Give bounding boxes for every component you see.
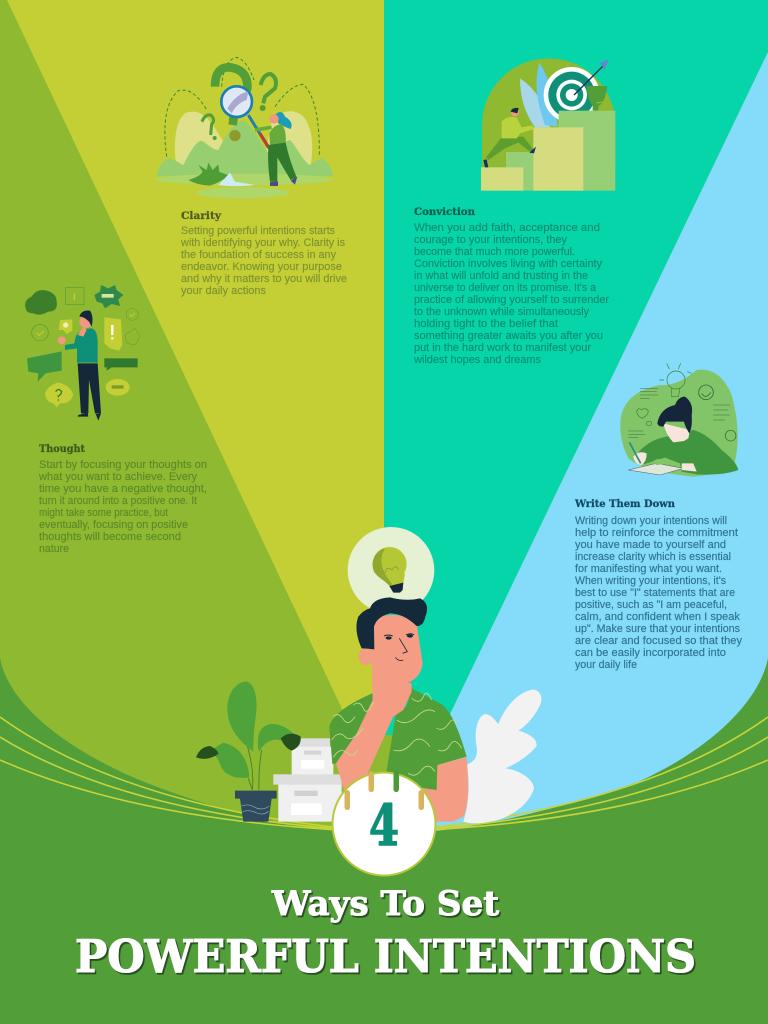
text block: thought [38,443,207,555]
text block: conviction: in what will unfold and trusting in the [414,270,588,282]
illustration: write them down [620,363,738,477]
text block: write them down: your daily life [575,659,637,671]
text block: clarity: Setting powerful intentions starts [181,225,336,237]
text block: write them down: you have made to yourself and [575,539,726,551]
text block: conviction: practice of allowing yourself to surrender [414,294,609,306]
text block: conviction: wildest hopes and dreams [413,354,542,366]
text block: conviction: Conviction involves living with certainty [414,258,603,270]
text block: conviction: put in the hard work to manifest your [414,342,591,354]
text block: thought: what you want to achieve. Every [38,471,198,483]
text block: clarity: the foundation of success in any [181,249,337,261]
text block: clarity: your daily actions [181,285,267,297]
text block: thought: time you have a negative thought, [39,483,207,495]
text block: conviction: holding tight to the belief that [414,318,558,330]
text block: write them down: for manifesting what you want. [575,563,722,575]
text block: write them down: can be easily incorporated into [575,647,726,659]
text block: thought: thoughts will become second [39,531,181,543]
number badge: 4 [369,793,399,859]
title: Ways To Set [271,884,499,924]
text block: conviction: courage to your intentions, they [414,234,568,246]
text block: write them down: Write Them Down [574,498,675,510]
illustration: light bulb [348,527,434,614]
text block: conviction: something greater awaits you after you [414,330,603,342]
number badge [332,771,436,876]
text block: write them down: help to reinforce the commitment [575,527,738,539]
curved yellow lines [0,717,768,832]
text block: clarity [180,210,347,297]
text block: write them down: When writing your intentions, it's [575,575,727,587]
text block: conviction: to the unknown while simultaneously [414,306,590,318]
title [75,884,696,983]
text block: clarity: Clarity [181,210,222,222]
text block: conviction: Conviction [414,206,475,218]
illustration: plant and boxes [196,682,342,822]
text block: write them down: increase clarity which is essential [575,551,731,563]
text block: clarity: with identifying your why. Clarity is [180,237,346,249]
bottom green band [0,658,768,1024]
text block: thought: Start by focusing your thoughts on [39,459,207,471]
illustration: conviction [481,58,615,191]
text block: write them down: calm, and confident when I speak [575,611,741,623]
text block: write them down: Writing down your intentions will [575,515,727,527]
illustration: white leaf [463,689,541,823]
text block: clarity: endeavor. Knowing your purpose [181,261,342,273]
illustration: clarity [155,57,333,198]
illustration: thinking man [329,597,468,822]
text block: thought: eventually, focusing on positive [39,519,188,531]
text block: conviction: universe to deliver on its promise. It's a [414,282,596,294]
text block: conviction [413,206,609,366]
text block: thought: might take some practice, but [39,507,168,519]
text block: thought: Thought [39,443,85,455]
text block: write them down: best to use "I" statements that are [575,587,735,599]
text block: write them down: positive, such as "I am peaceful, [575,599,727,611]
text block: clarity: and why it matters to you will drive [181,273,347,285]
text block: write them down [574,498,743,671]
illustration: thought [25,285,140,421]
text block: write them down: are clear and focused so that they [575,635,743,647]
text block: write them down: up". Make sure that your intentions [575,623,741,635]
text block: conviction: become that much more powerful. [414,246,575,258]
title: POWERFUL INTENTIONS [75,930,696,983]
text block: thought: nature [39,543,69,555]
text block: thought: turn it around into a positive one. It [39,495,197,507]
text block: conviction: When you add faith, acceptance and [414,222,600,234]
